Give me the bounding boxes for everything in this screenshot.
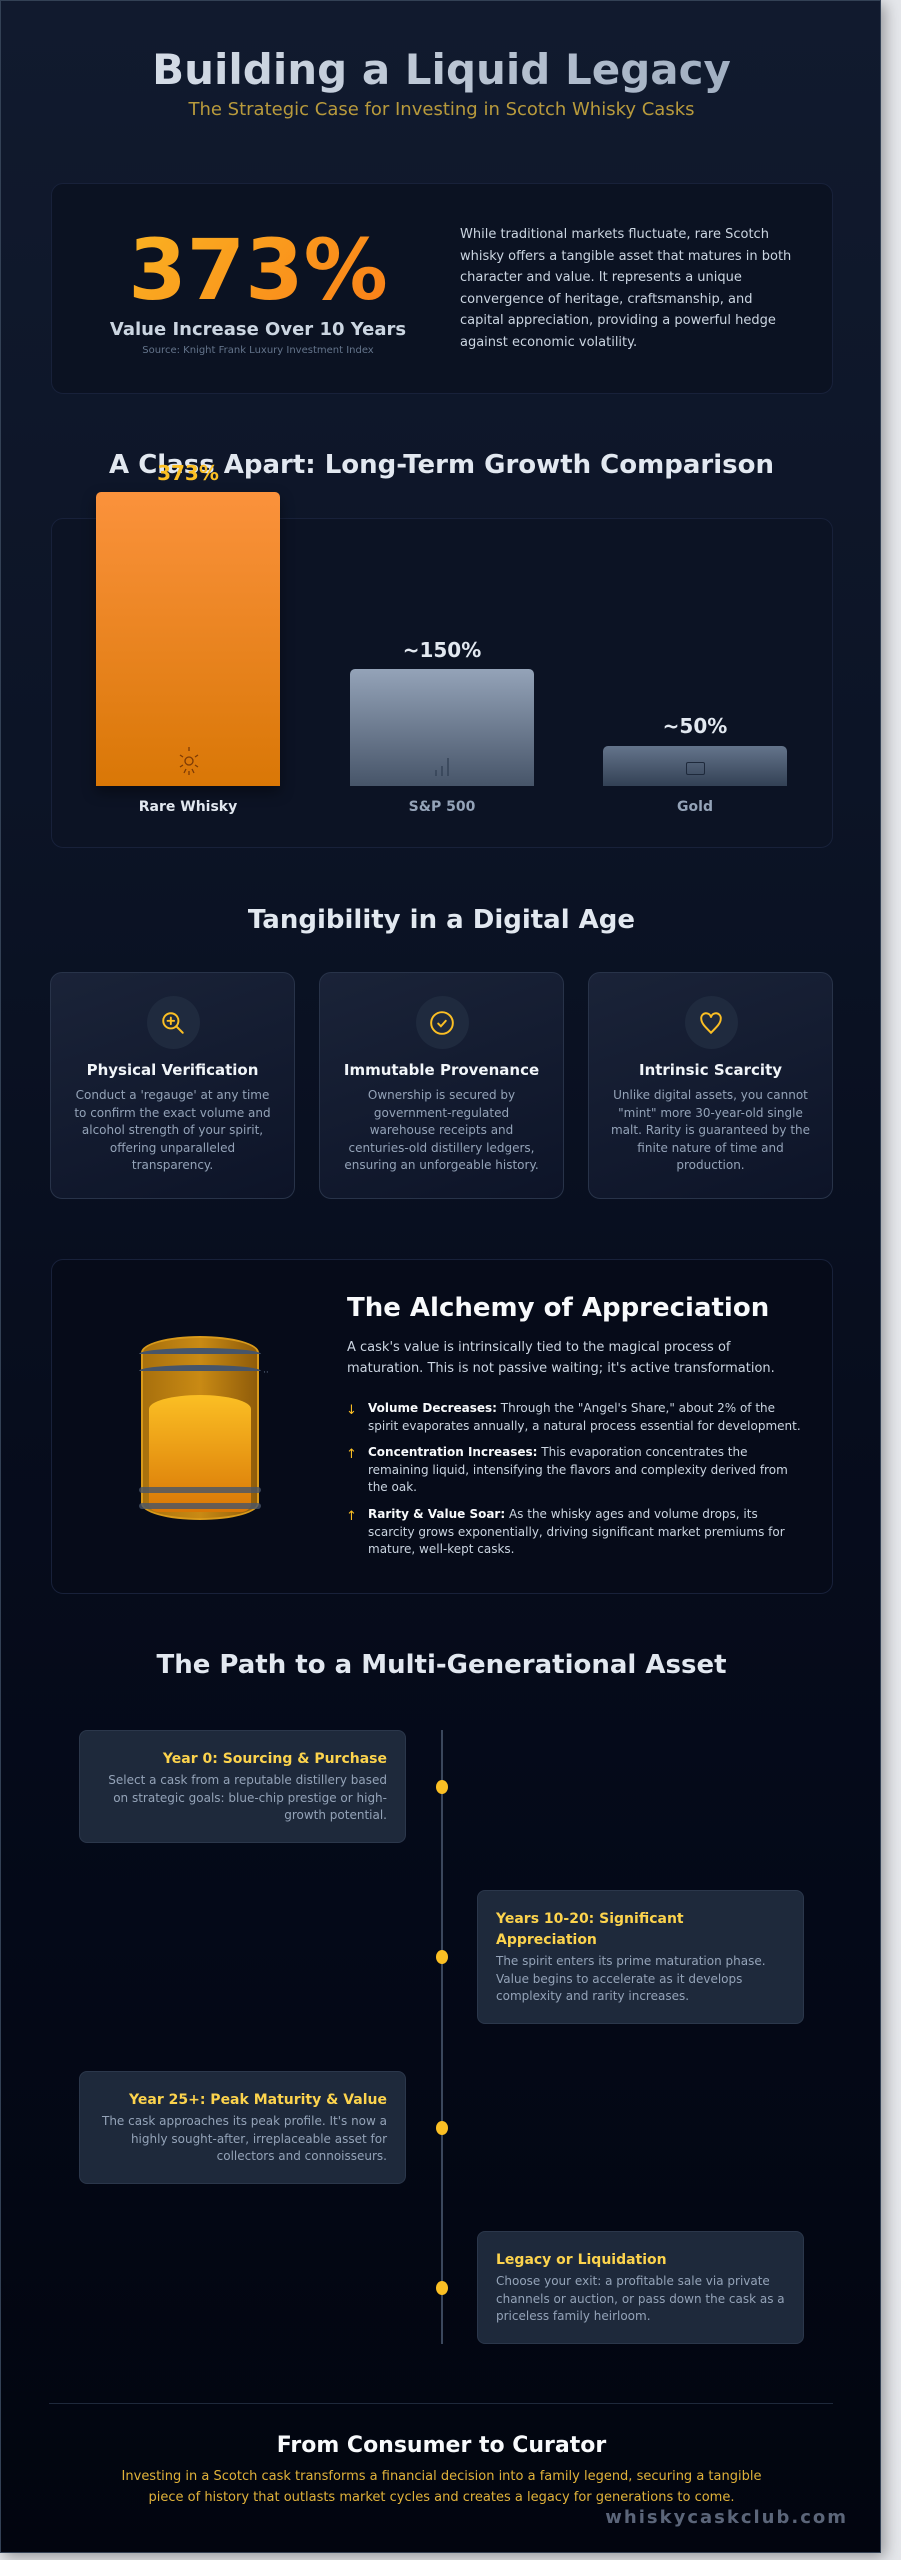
card: immutable provenance: Ownership is secured by government-regulated warehouse receipts and centuries-old distillery ledgers, ensuring an unforgeable history. [344,1088,539,1172]
panel: headline stat [51,183,833,394]
card: physical verification [50,972,295,1199]
bar: rare whisky [96,492,280,786]
heading: growth comparison: A Class Apart: Long-Term Growth Comparison [109,450,774,480]
card: immutable provenance: Immutable Provenance [344,1061,539,1079]
card: immutable provenance [319,972,564,1199]
card: intrinsic scarcity: Unlike digital assets, you cannot "mint" more 30-year-old single malt. Rarity is guaranteed by the finite nature of time and production. [611,1088,810,1172]
card: intrinsic scarcity: Intrinsic Scarcity [639,1061,782,1079]
step: years 10-20: Years 10-20: Significant Appreciation [496,1911,684,1948]
heading: path: The Path to a Multi-Generational Asset [156,1650,727,1680]
bullets list [346,1401,801,1556]
icon: barrel [139,1336,269,1520]
bar chart [94,461,787,815]
brand: domain: whiskycaskclub.com [605,2507,848,2528]
bullet: volume decreases: ↓ [346,1403,357,1418]
bullet: concentration increases: Concentration Increases: This evaporation concentrates the remaining liquid, intensifying the flavors and complexity derived from the oak. [368,1445,788,1494]
step: years 10-20: The spirit enters its prime maturation phase. Value begins to accelerate as it develops complexity and rarity increases. [496,1954,766,2003]
title: Building a Liquid Legacy [152,45,731,94]
bar labels [139,799,713,815]
intro text: While traditional markets fluctuate, rare Scotch whisky offers a tangible asset that matures in both character and value. It represents a unique convergence of heritage, craftsmanship, and capital appreciation, providing a powerful hedge against economic volatility. [460,227,791,350]
big stat 373%: 373% [128,221,388,319]
title [1,43,882,97]
big stat 373% [52,218,464,322]
step: years 10-20 [477,1890,804,2024]
bullet: volume decreases: Volume Decreases: Through the "Angel's Share," about 2% of the spirit evaporates annually, a natural process essential for development. [368,1401,801,1433]
bar labels: Gold [677,799,713,815]
icon: heart [684,996,738,1049]
step: year 0: Select a cask from a reputable distillery based on strategic goals: blue-chip prestige or high-​growth potential. [108,1773,387,1822]
timeline [79,1730,804,2344]
intro paragraph: A cask's value is intrinsically tied to the magical process of maturation. This is not passive waiting; it's active transformation. [347,1340,775,1376]
dot [436,1950,448,1964]
bar: gold [603,746,787,786]
footer text: Investing in a Scotch cask transforms a financial decision into a family legend, securing a tangible piece of history that outlasts market cycles and creates a legacy for generations to come. [122,2469,761,2505]
source: Source: Knight Frank Luxury Investment Index [142,345,374,356]
stat label: Value Increase Over 10 Years [110,319,406,340]
panel: alchemy of appreciation: ·· [263,1368,269,1378]
heading: alchemy: The Alchemy of Appreciation [347,1293,769,1323]
dot [436,2281,448,2295]
value: 373%: 373% [157,461,219,485]
step: year 0: Year 0: Sourcing & Purchase [163,1751,387,1767]
bar labels: Rare Whisky [139,799,237,815]
bullet: rarity: ↑ [346,1509,357,1524]
step: year 25+: The cask approaches its peak profile. It's now a highly sought-after, irreplaceable asset for collectors and connoisseurs. [102,2114,387,2163]
card: intrinsic scarcity [588,972,833,1199]
card: physical verification: Conduct a 'regauge' at any time to confirm the exact volume and alcohol strength of your spirit, offering unparalleled transparency. [74,1088,271,1172]
icon: check circle [416,996,468,1049]
footer heading: From Consumer to Curator [277,2433,606,2458]
bar labels: S&P 500 [409,799,475,815]
bar: S&P 500 [350,669,534,786]
value: ~50%: ~50% [663,714,727,738]
step: year 25+ [79,2071,406,2184]
value: ~150%: ~150% [403,638,481,662]
step: year 0 [79,1730,406,1843]
bullet: concentration increases: ↑ [346,1447,357,1462]
step: legacy: Legacy or Liquidation [496,2252,667,2268]
subtitle: The Strategic Case for Investing in Scotch Whisky Casks [188,99,695,120]
step: legacy [477,2231,804,2344]
heading: tangibility: Tangibility in a Digital Age [248,905,635,935]
bullet: rarity: Rarity & Value Soar: As the whisky ages and volume drops, its scarcity grows exponentially, driving significant market premiums for mature, well-kept casks. [368,1507,785,1556]
dot [436,2121,448,2135]
step: legacy: Choose your exit: a profitable sale via private channels or auction, or pass down the cask as a priceless family heirloom. [496,2274,785,2323]
panel: growth chart [51,518,833,848]
dot [436,1780,448,1794]
card: physical verification: Physical Verification [87,1061,258,1079]
panel: alchemy of appreciation [51,1259,833,1594]
step: year 25+: Year 25+: Peak Maturity & Value [129,2092,387,2108]
icon: magnifier [146,996,200,1049]
